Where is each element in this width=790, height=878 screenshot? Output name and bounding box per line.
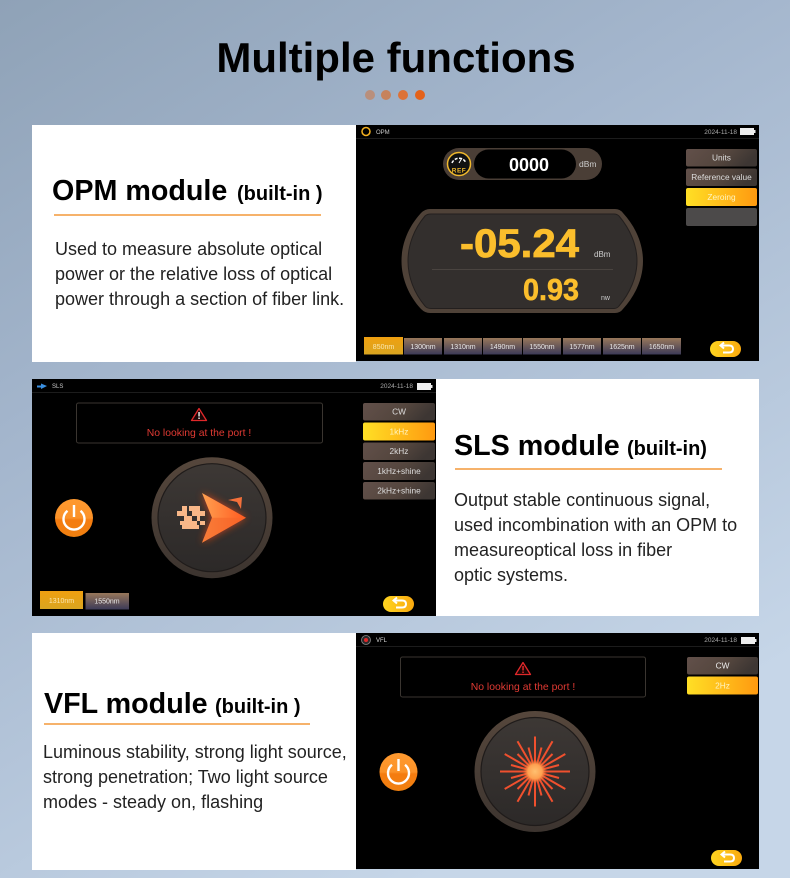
wavelength buttons: 1550nm (529, 344, 555, 351)
wavelength buttons: 1310nm (49, 598, 74, 605)
text: SLS description: Output stable continuous signal, (454, 490, 710, 510)
back button (383, 596, 414, 612)
warning box (76, 403, 322, 443)
wavelength buttons: 1550nm (94, 598, 120, 606)
main readout (402, 209, 643, 313)
heading: SLS module: (built-in) (627, 438, 707, 460)
text: SLS description: used incombination with an OPM to (454, 515, 737, 535)
heading: VFL module: VFL module (44, 688, 208, 720)
status bar: OPM (376, 130, 390, 136)
warning box (400, 657, 646, 697)
panel: OPM text (32, 125, 356, 362)
heading: VFL module: (built-in ) (215, 696, 301, 718)
side buttons: CW (716, 660, 730, 670)
wavelength buttons: 1300nm (410, 344, 436, 351)
main readout: dBm (594, 250, 611, 259)
panel: SLS screen (32, 379, 436, 616)
side buttons (687, 657, 758, 694)
wavelength buttons: 1625nm (609, 344, 635, 351)
text: VFL description: strong penetration; Two light source (43, 767, 328, 787)
main readout: nw (601, 295, 611, 302)
dial with laser arrow (152, 457, 272, 578)
main readout: 0.93 (523, 273, 579, 307)
wavelength buttons (40, 591, 129, 610)
reference value pill: REF (452, 168, 466, 174)
reference value pill: dBm (579, 159, 596, 169)
side buttons: Reference value (691, 172, 752, 182)
heading: SLS module: SLS module (454, 430, 620, 462)
title dots (365, 90, 425, 100)
wavelength buttons: 1490nm (490, 344, 515, 351)
text: VFL description: Luminous stability, strong light source, (43, 742, 347, 762)
side buttons: 2kHz (390, 446, 408, 456)
wavelength buttons: 1310nm (450, 344, 476, 351)
text: OPM description: power through a section of fiber link. (55, 289, 344, 309)
side buttons: 2Hz (715, 680, 730, 690)
text: VFL description: modes - steady on, flashing (43, 792, 263, 812)
panel: VFL screen (356, 633, 759, 869)
status bar (32, 383, 436, 393)
text: SLS description: optic systems. (454, 565, 568, 585)
warning box: No looking at the port ! (471, 682, 575, 693)
panel: SLS text (436, 379, 759, 616)
wavelength buttons: 1577nm (569, 344, 595, 351)
warning box: No looking at the port ! (147, 428, 251, 439)
wavelength buttons: 1650nm (649, 344, 674, 351)
side buttons: 2kHz+shine (377, 486, 421, 496)
panel: OPM screen (356, 125, 759, 361)
side buttons (686, 149, 757, 226)
status bar: 2024-11-18 (380, 383, 413, 390)
text: OPM description: Used to measure absolute optical (55, 239, 322, 259)
status bar: 2024-11-18 (704, 129, 737, 136)
status bar: VFL (376, 638, 388, 644)
title: Multiple functions (216, 34, 576, 81)
side buttons: 1kHz (390, 426, 408, 436)
wavelength buttons (364, 337, 681, 354)
back button (710, 341, 741, 357)
reference value pill (443, 148, 602, 180)
text: SLS description: measureoptical loss in fiber (454, 540, 672, 560)
side buttons: 1kHz+shine (377, 466, 421, 476)
status bar (356, 128, 759, 139)
status bar (356, 636, 759, 647)
dial with starburst (474, 711, 596, 832)
status bar: 2024-11-18 (704, 637, 737, 644)
panel: VFL text (32, 633, 356, 870)
side buttons (363, 403, 435, 500)
power button (380, 753, 418, 791)
power button (55, 499, 93, 537)
side buttons: CW (392, 406, 406, 416)
wavelength buttons: 850nm (373, 344, 394, 351)
side buttons: Units (712, 152, 731, 162)
text: OPM description: power or the relative loss of optical (55, 264, 332, 284)
main readout: -05.24 (460, 222, 580, 266)
reference value pill: 0000 (509, 155, 549, 175)
heading: OPM module: OPM module (52, 175, 227, 207)
side buttons: Zeroing (707, 192, 736, 202)
back button (711, 850, 742, 866)
status bar: SLS (52, 384, 63, 390)
heading: OPM module: (built-in ) (237, 183, 323, 205)
